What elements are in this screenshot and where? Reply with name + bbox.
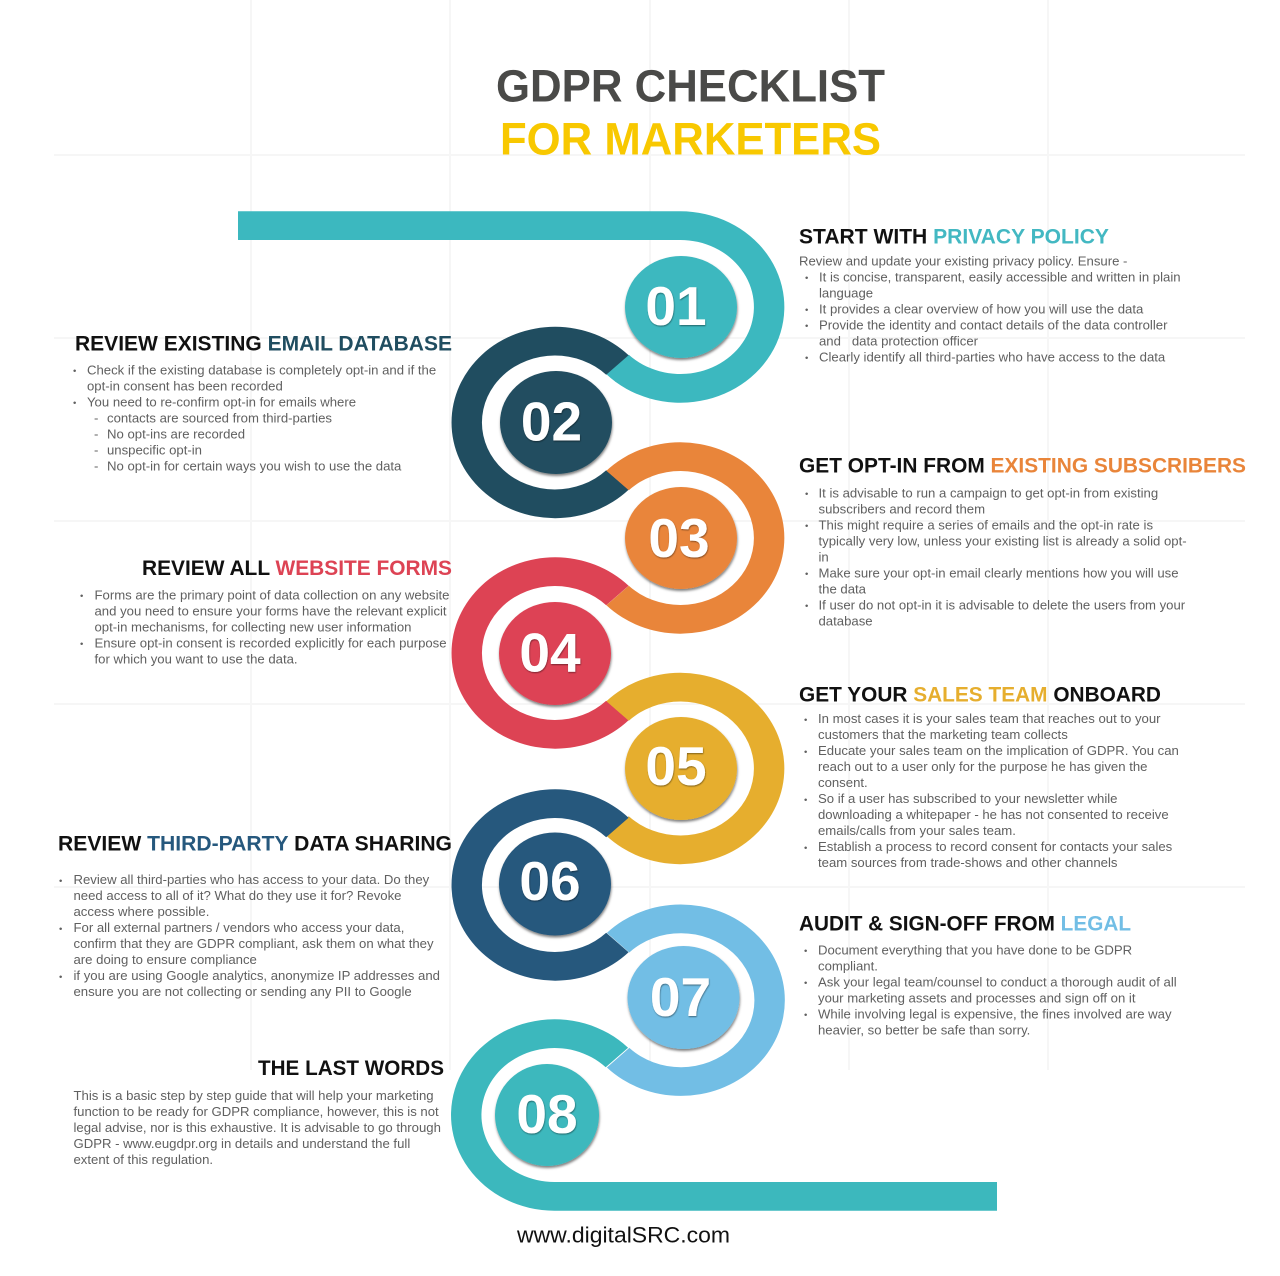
panel: get opt-in from existing subscribers: subscribers and record them — [818, 502, 985, 516]
panel: get opt-in from existing subscribers: in — [818, 550, 829, 564]
panel: audit and sign-off from legal: AUDIT & SIGN-OFF FROM LEGAL — [799, 911, 1131, 935]
panel: review existing email database: opt-in consent has been recorded — [87, 378, 283, 394]
panel: audit and sign-off from legal: • — [804, 978, 807, 989]
panel: review third-party data sharing: • — [59, 924, 62, 935]
panel: get your sales team onboard: • — [804, 843, 807, 854]
badge 02 — [500, 371, 612, 474]
panel: the last words: function to be ready for GDPR compliance, however, this is not — [74, 1104, 439, 1119]
panel: get opt-in from existing subscribers: This might require a series of emails and the opt-in rate is — [818, 518, 1153, 532]
ribbon: 07 light blue — [607, 905, 785, 1096]
panel: start with privacy policy: • — [805, 273, 808, 284]
panel: get your sales team onboard: reach out to a user only for the purpose he has given the — [818, 759, 1147, 774]
panel: audit and sign-off from legal — [799, 911, 1177, 1038]
ribbon: 08 teal — [451, 1019, 997, 1211]
panel: get your sales team onboard: • — [804, 795, 807, 806]
panel: review all website forms — [80, 556, 452, 666]
panel: review existing email database: • — [73, 398, 76, 409]
panel: get your sales team onboard: downloading a whitepaper - he has not consented to receive — [818, 807, 1169, 822]
panel: review third-party data sharing: Review all third-parties who has access to your data. Do they — [74, 872, 430, 887]
panel: review third-party data sharing: ensure you are not collecting or sending any PII to Google — [74, 984, 412, 999]
panel: review existing email database: Check if the existing database is completely opt-in and if the — [87, 362, 436, 378]
panel: review existing email database: - — [94, 458, 98, 474]
ribbon: 01 teal — [238, 211, 784, 403]
panel: review all website forms: opt-in mechanisms, for collecting new user information — [94, 620, 411, 634]
panel: review existing email database: • — [73, 366, 76, 377]
panel: review existing email database: unspecific opt-in — [107, 442, 202, 458]
panel: get opt-in from existing subscribers: typically very low, unless your existing list is already a solid opt- — [818, 534, 1187, 548]
panel: get opt-in from existing subscribers: • — [805, 569, 808, 580]
badge 06: 06 — [519, 850, 581, 912]
badge 08: 08 — [516, 1083, 578, 1145]
badge 04: 04 — [519, 622, 581, 684]
panel: the last words: GDPR - www.eugdpr.org in details and understand the full — [74, 1136, 410, 1151]
ribbon: 04 red — [452, 557, 629, 749]
panel: get your sales team onboard: GET YOUR SALES TEAM ONBOARD — [799, 682, 1161, 706]
panel: review existing email database: No opt-ins are recorded — [107, 426, 245, 442]
panel: start with privacy policy: It is concise, transparent, easily accessible and written in plain — [819, 270, 1181, 284]
panel: review all website forms: for which you want to use the data. — [94, 652, 298, 666]
panel: get your sales team onboard: • — [804, 747, 807, 758]
panel: start with privacy policy: Review and update your existing privacy policy. Ensure - — [799, 254, 1127, 268]
panel: review existing email database: - — [94, 426, 98, 442]
panel: review existing email database: REVIEW EXISTING EMAIL DATABASE — [75, 331, 452, 355]
panel: review third-party data sharing: REVIEW THIRD-PARTY DATA SHARING — [58, 831, 452, 855]
ribbon: 02 dark teal — [452, 327, 629, 518]
panel: review third-party data sharing — [58, 831, 452, 999]
badge 05: 05 — [645, 735, 707, 797]
panel: audit and sign-off from legal: • — [804, 1010, 807, 1021]
panel: review existing email database: - — [94, 410, 98, 426]
ribbon: 05 yellow — [606, 673, 784, 864]
badge 05 — [625, 717, 737, 820]
panel: start with privacy policy: • — [805, 305, 808, 316]
panel: start with privacy policy: and data protection officer — [819, 334, 979, 348]
panel: get opt-in from existing subscribers: • — [805, 489, 808, 500]
panel: review third-party data sharing: For all external partners / vendors who access your data, — [74, 920, 404, 935]
panel: audit and sign-off from legal: Ask your legal team/counsel to conduct a thorough audit of all — [818, 974, 1177, 990]
panel: review all website forms: • — [80, 639, 83, 650]
title: FOR MARKETERS — [500, 114, 881, 164]
panel: start with privacy policy: It provides a clear overview of how you will use the data — [819, 302, 1144, 316]
panel: get opt-in from existing subscribers: database — [818, 614, 873, 628]
panel: audit and sign-off from legal: • — [804, 946, 807, 957]
panel: review third-party data sharing: • — [59, 876, 62, 887]
panel: get your sales team onboard: Establish a process to record consent for contacts your sales — [818, 839, 1173, 854]
panel: review third-party data sharing: confirm that they are GDPR compliant, ask them on what they — [74, 936, 434, 951]
panel: audit and sign-off from legal: While involving legal is expensive, the fines involved are way — [818, 1006, 1172, 1022]
panel: the last words — [74, 1056, 444, 1167]
panel: get opt-in from existing subscribers: • — [805, 521, 808, 532]
panel: start with privacy policy: • — [805, 353, 808, 364]
panel: get your sales team onboard: Educate your sales team on the implication of GDPR. You can — [818, 743, 1179, 758]
panel: review existing email database: - — [94, 442, 98, 458]
ribbon: 03 orange — [606, 442, 784, 634]
footer url: www.digitalSRC.com — [516, 1222, 730, 1247]
badge 01: 01 — [645, 275, 707, 337]
title — [496, 60, 885, 164]
panel: get opt-in from existing subscribers: If user do not opt-in it is advisable to delete the users from your — [818, 598, 1186, 612]
panel: review third-party data sharing: are doing to ensure compliance — [74, 952, 257, 967]
panel: review third-party data sharing: • — [59, 972, 62, 983]
panel: review all website forms: and you need to ensure your forms have the relevant explicit — [94, 604, 447, 618]
panel: get your sales team onboard: emails/calls from your sales team. — [818, 823, 1016, 838]
panel: get your sales team onboard: customers that the marketing team collects — [818, 727, 1068, 742]
panel: review all website forms: Ensure opt-in consent is recorded explicitly for each purpose — [94, 636, 447, 650]
badge 04 — [499, 602, 611, 705]
ribbon: 06 blue — [452, 789, 629, 981]
badge 03 — [625, 487, 737, 589]
badge 07 — [628, 946, 740, 1049]
badge 07: 07 — [650, 966, 711, 1028]
panel: audit and sign-off from legal: compliant. — [818, 958, 878, 974]
panel: get your sales team onboard: In most cases it is your sales team that reaches out to your — [818, 711, 1161, 726]
panel: start with privacy policy — [799, 224, 1181, 364]
panel: get your sales team onboard: • — [804, 715, 807, 726]
panel: start with privacy policy: language — [819, 286, 873, 300]
panel: audit and sign-off from legal: your marketing assets and processes and sign off on it — [818, 990, 1136, 1006]
panel: audit and sign-off from legal: heavier, so better be safe than sorry. — [818, 1022, 1030, 1038]
badge 06 — [499, 832, 611, 936]
panel: get opt-in from existing subscribers: GET OPT-IN FROM EXISTING SUBSCRIBERS — [799, 453, 1246, 477]
panel: the last words: THE LAST WORDS — [258, 1056, 444, 1080]
panel: start with privacy policy: • — [805, 321, 808, 332]
panel: review existing email database: contacts are sourced from third-parties — [107, 410, 332, 426]
panel: the last words: extent of this regulation. — [74, 1152, 213, 1167]
badge 02: 02 — [521, 390, 582, 452]
panel: start with privacy policy: Clearly identify all third-parties who have access to the data — [819, 350, 1166, 364]
panel: review all website forms: Forms are the primary point of data collection on any website — [94, 588, 449, 602]
panel: get opt-in from existing subscribers: the data — [818, 582, 867, 596]
panel: review third-party data sharing: access where possible. — [74, 904, 209, 919]
panel: get opt-in from existing subscribers — [799, 453, 1246, 628]
panel: review third-party data sharing: if you are using Google analytics, anonymize IP addresses and — [74, 968, 440, 983]
panel: review all website forms: • — [80, 591, 83, 602]
badge 01 — [625, 256, 737, 358]
panel: review third-party data sharing: need access to all of it? What do they use it for? Revoke — [74, 888, 401, 903]
title: GDPR CHECKLIST — [496, 60, 885, 112]
panel: get your sales team onboard: consent. — [818, 775, 868, 790]
panel: get your sales team onboard — [799, 682, 1179, 870]
panel: review all website forms: REVIEW ALL WEBSITE FORMS — [142, 556, 452, 580]
panel: review existing email database — [73, 331, 452, 474]
badge 08 — [495, 1064, 599, 1166]
panel: get opt-in from existing subscribers: Make sure your opt-in email clearly mentions how you will use — [818, 566, 1179, 580]
panel: get your sales team onboard: So if a user has subscribed to your newsletter while — [818, 791, 1117, 806]
panel: the last words: legal advise, nor is this exhaustive. It is advisable to go through — [74, 1120, 441, 1135]
panel: get your sales team onboard: team sources from trade-shows and other channels — [818, 855, 1118, 870]
panel: review existing email database: No opt-in for certain ways you wish to use the data — [107, 458, 402, 474]
panel: audit and sign-off from legal: Document everything that you have done to be GDPR — [818, 942, 1132, 958]
badge 03: 03 — [648, 507, 710, 569]
panel: get opt-in from existing subscribers: It is advisable to run a campaign to get opt-in from existing — [818, 486, 1158, 500]
panel: get opt-in from existing subscribers: • — [805, 601, 808, 612]
panel: review existing email database: You need to re-confirm opt-in for emails where — [87, 394, 356, 410]
panel: the last words: This is a basic step by step guide that will help your marketing — [74, 1088, 434, 1103]
panel: start with privacy policy: Provide the identity and contact details of the data controller — [819, 318, 1168, 332]
panel: start with privacy policy: START WITH PRIVACY POLICY — [799, 224, 1109, 248]
